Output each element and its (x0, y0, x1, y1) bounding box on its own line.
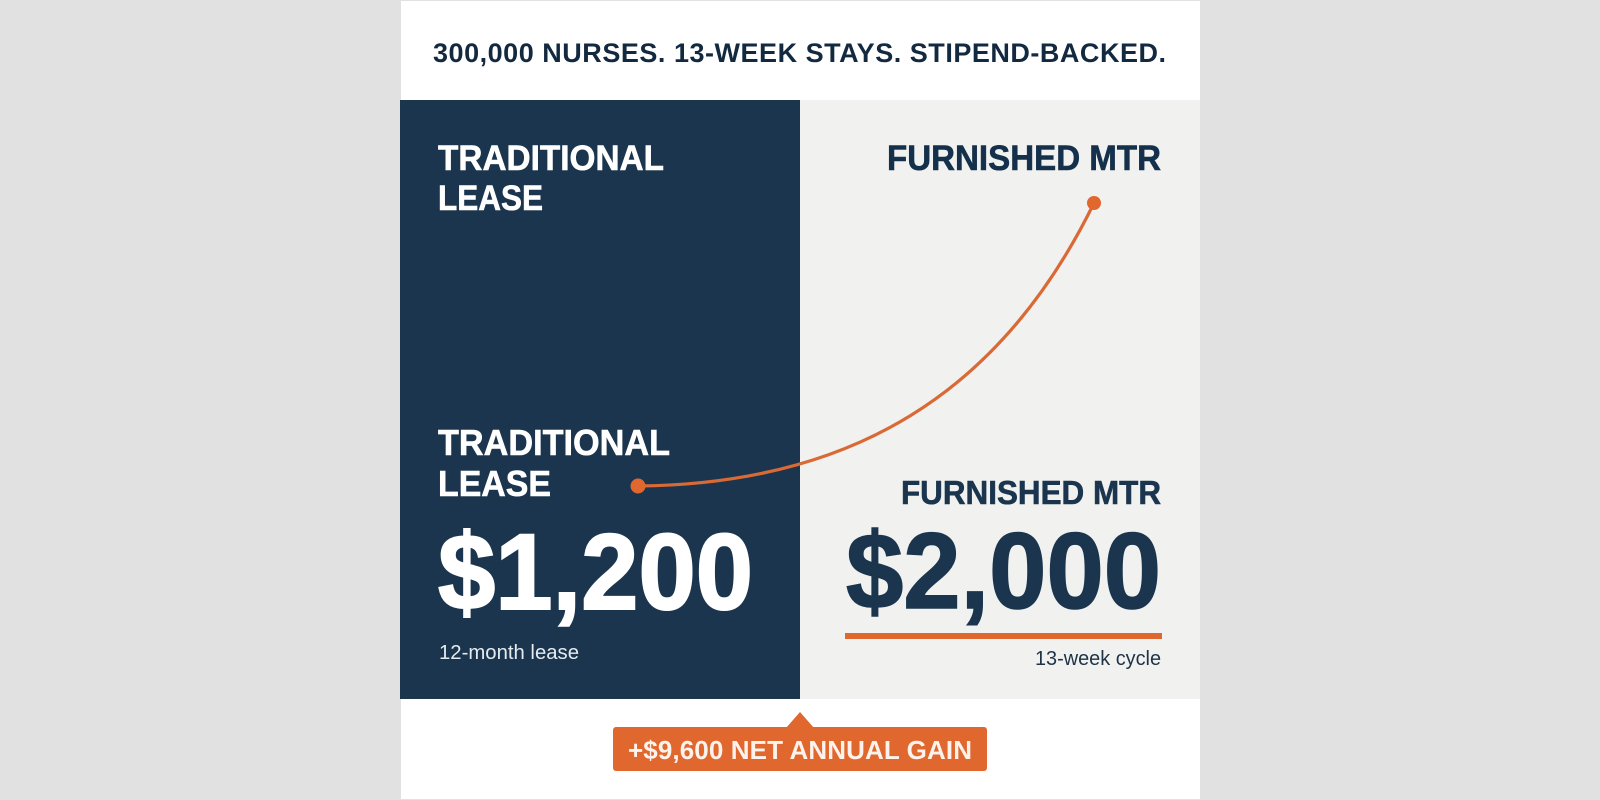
heading: furnished MTR top: FURNISHED MTR (887, 139, 1161, 178)
label: traditional lease lower (438, 422, 670, 504)
heading: traditional lease top: TRADITIONAL (438, 139, 664, 178)
caption: 12-month lease: 12-month lease (439, 642, 579, 664)
panel: furnished MTR (800, 100, 1200, 699)
panel: traditional lease (400, 100, 800, 699)
callout: net annual gain: +$9,600 NET ANNUAL GAIN (628, 735, 972, 765)
value: $1,200: $1,200 (438, 511, 753, 632)
value: $2,000: $2,000 (846, 510, 1161, 631)
underline (845, 633, 1162, 639)
label: furnished MTR lower: FURNISHED MTR (901, 474, 1161, 511)
heading: traditional lease top (438, 139, 664, 218)
title: 300,000 NURSES. 13-WEEK STAYS. STIPEND-BACKED. (433, 38, 1166, 68)
growth curve (630, 196, 1101, 494)
label: traditional lease lower: TRADITIONAL (438, 422, 670, 463)
end dot (1087, 196, 1101, 210)
heading: traditional lease top: LEASE (438, 179, 543, 218)
caption: 13-week cycle: 13-week cycle (1035, 648, 1161, 670)
callout: net annual gain (613, 712, 987, 771)
header band (401, 1, 1200, 799)
start dot (630, 478, 646, 494)
label: traditional lease lower: LEASE (438, 463, 551, 504)
